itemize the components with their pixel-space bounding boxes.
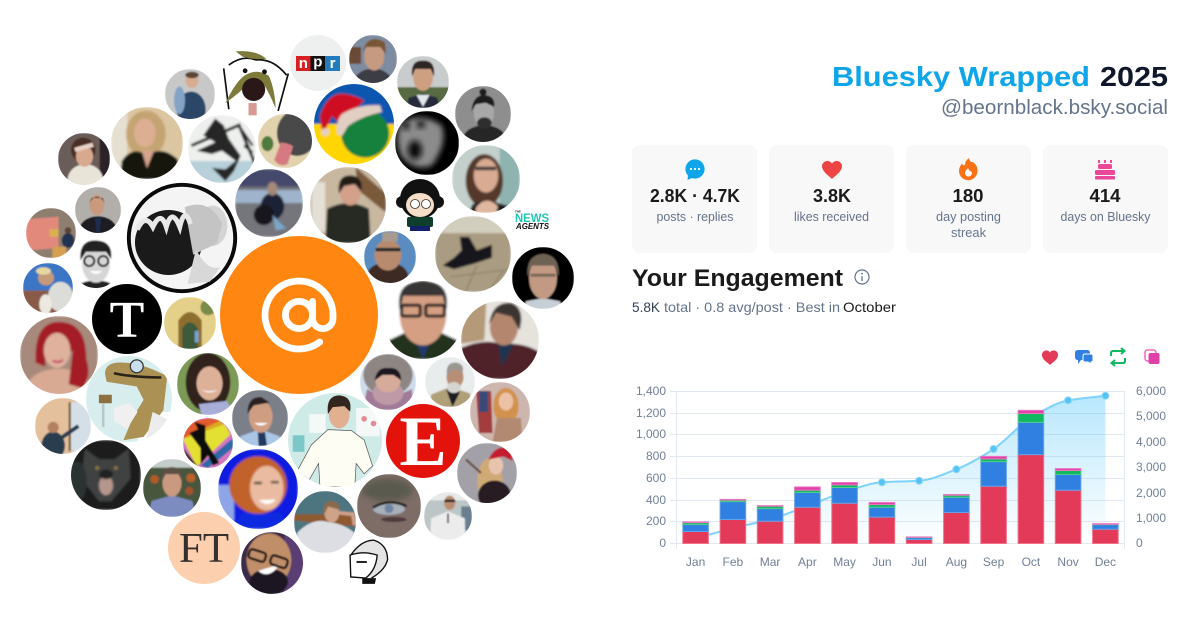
avatar: NPR logo: p: [313, 54, 322, 70]
avatar: The News Agents logo: THE: [515, 210, 521, 214]
avatar: The News Agents logo: NEWS: [515, 213, 549, 225]
card: days on Bluesky: [1043, 145, 1168, 253]
avatar: kid in headband: [58, 133, 110, 185]
stacked bars: [683, 410, 1118, 544]
left axis labels: 200: [646, 514, 666, 528]
card: likes received: likes received: [794, 210, 869, 224]
avatar: blurry ghost face: [395, 111, 459, 175]
icon: birthday cake: [1095, 160, 1115, 180]
avatar: man in dark suit: [75, 187, 121, 233]
month labels: Sep: [983, 555, 1005, 569]
left axis labels: [636, 384, 666, 550]
month labels: Apr: [798, 555, 817, 569]
left axis labels: 1,400: [636, 384, 666, 398]
avatar: blonde woman with santa hat: [457, 443, 517, 503]
avatar: bald laughing man with glasses: [241, 532, 306, 595]
month labels: Jan: [686, 555, 705, 569]
card: posts and replies: [632, 145, 757, 253]
bars: reposts: [683, 414, 1118, 538]
avatar: drawn woman line art: [350, 540, 388, 584]
avatar: bride of frankenstein: [126, 182, 238, 294]
title: Bluesky Wrapped 2025: [832, 61, 1168, 92]
avatar: smiling man with blue tie: [232, 390, 288, 446]
avatar: older man on black: [512, 247, 574, 309]
avatar: woman in fur hood: [360, 354, 416, 410]
avatar: red-haired woman on blue: [218, 449, 298, 529]
title: Bluesky Wrapped 2025: Bluesky Wrapped: [832, 61, 1090, 92]
heading: Your Engagement: Your Engagement: [632, 265, 843, 292]
month labels: Aug: [946, 555, 967, 569]
avatar: Ukraine flag santa hat: [314, 84, 394, 164]
avatar: orange at-sign main bubble: [220, 236, 378, 394]
avatar: man in white lab coat: [424, 492, 472, 540]
avatar: The News Agents logo: [515, 210, 549, 231]
avatar bubble cluster: [20, 35, 574, 595]
avatar: New York Times logo: T: [110, 292, 144, 349]
avatar: rainbow silhouette: [183, 418, 233, 468]
month labels: Jun: [872, 555, 892, 569]
avatar: The Economist E logo: [386, 403, 460, 481]
cumulative area: [696, 396, 1105, 544]
left axis labels: 0: [659, 536, 666, 550]
bars: likes: [683, 455, 1118, 544]
avatar: bearded man with topknot: [455, 86, 511, 142]
avatar: man in dark-rim glasses: [389, 281, 457, 359]
icon: heart: [822, 161, 842, 179]
month labels: Dec: [1095, 555, 1116, 569]
icon: info: [855, 270, 869, 284]
avatar: close-up eye: [357, 474, 421, 538]
avatar: red-haired woman: [20, 316, 98, 394]
month labels: Feb: [723, 555, 744, 569]
avatar: smiling man with round glasses: [79, 240, 112, 288]
avatar: New York Times logo: [92, 284, 162, 354]
chart legend icons: [1042, 348, 1160, 366]
avatar: NPR logo: [290, 35, 346, 91]
avatar: The Economist E logo: E: [399, 403, 447, 481]
avatar: cartoon scientist in white shirt: [288, 393, 382, 487]
cumulative line: [696, 396, 1105, 538]
avatar: heraldic lion: [188, 115, 256, 183]
stats cards row: [632, 145, 1168, 253]
avatar: dog with tongue: [258, 114, 312, 168]
title: Bluesky Wrapped 2025: 2025: [1100, 61, 1168, 92]
legend: replies bubbles: [1075, 350, 1093, 364]
card: days on Bluesky: days on Bluesky: [1060, 210, 1151, 224]
grid: [670, 391, 1125, 549]
engagement summary text: [632, 299, 896, 315]
right axis labels: 6,000: [1136, 384, 1166, 398]
avatar: man in hat with dog: [23, 263, 73, 314]
card: day posting streak: 180: [952, 186, 984, 206]
avatar: black dog on stone floor: [435, 216, 511, 292]
avatar: Financial Times FT logo: FT: [179, 526, 229, 572]
avatar: red-haired girl with flag: [470, 382, 530, 442]
left axis labels: 1,200: [636, 406, 666, 420]
card: day posting streak: [906, 145, 1031, 253]
avatar: person with black dog in snow: [235, 169, 303, 237]
card: posts and replies: posts · replies: [656, 210, 734, 224]
month labels: Oct: [1022, 555, 1041, 569]
month labels: Jul: [911, 555, 927, 569]
card: posts and replies: 2.8K · 4.7K: [650, 186, 740, 206]
engagement summary text: 5.8K: [632, 299, 661, 315]
avatar: person under yellow arch: [164, 297, 216, 349]
avatar: blonde woman in black: [111, 107, 183, 179]
avatar: man presenting poster: [35, 398, 91, 460]
handle text: @beornblack.bsky.social: [941, 97, 1168, 119]
avatar: man with glasses selfie: [364, 231, 416, 283]
month labels: May: [833, 555, 856, 569]
icon: flame: [959, 158, 978, 180]
avatar: presenter by screen: [26, 208, 76, 259]
month labels: Nov: [1057, 555, 1079, 569]
icon: speech bubble: [685, 159, 705, 180]
left axis labels: 600: [646, 471, 666, 485]
card: likes received: [769, 145, 894, 253]
avatar: man in maroon sweater: [461, 301, 539, 379]
right axis labels: 1,000: [1136, 511, 1166, 525]
legend: reposts arrows: [1111, 348, 1125, 366]
left axis labels: 1,000: [636, 427, 666, 441]
card: day posting streak: streak: [951, 226, 987, 240]
card: day posting streak: day posting: [936, 210, 1001, 224]
left axis labels: 400: [646, 493, 666, 507]
avatar: man in plaid shirt: [143, 459, 201, 517]
right axis labels: [1136, 384, 1166, 550]
right axis labels: 4,000: [1136, 435, 1166, 449]
avatar: woman in white blouse: [294, 491, 356, 553]
engagement summary text: total · 0.8 avg/post · Best in: [664, 299, 840, 315]
bars: replies: [683, 422, 1118, 540]
right axis labels: 3,000: [1136, 460, 1166, 474]
avatar: older man with white beard: [425, 357, 475, 407]
avatar: South Park style character: [396, 179, 444, 231]
avatar: velociraptor scientist illustration: [86, 356, 181, 442]
bars: quotes: [683, 410, 1118, 537]
card: days on Bluesky: 414: [1090, 186, 1120, 206]
avatar: woman in dark blazer: [310, 167, 386, 243]
right axis labels: 2,000: [1136, 486, 1166, 500]
engagement summary text: October: [843, 299, 896, 315]
right axis labels: 5,000: [1136, 409, 1166, 423]
legend: likes heart: [1042, 350, 1058, 365]
avatar: snarling wolf: [66, 440, 141, 510]
monthly engagement chart: [636, 384, 1166, 569]
avatar: NPR logo: n: [299, 55, 308, 72]
cumulative points: [692, 392, 1109, 542]
avatar: NPR logo: r: [330, 55, 336, 72]
month labels: [686, 555, 1116, 569]
card: likes received: 3.8K: [813, 186, 851, 206]
avatar: moustache dog drawing: [224, 51, 288, 115]
left axis labels: 800: [646, 449, 666, 463]
legend: quotes pink squares: [1145, 350, 1160, 364]
avatar: Financial Times FT logo: [168, 512, 240, 584]
right axis labels: 0: [1136, 536, 1143, 550]
avatar: man in navy tee: [165, 69, 215, 119]
avatar: woman with glasses: [452, 145, 520, 213]
avatar: The News Agents logo: AGENTS: [515, 221, 549, 231]
avatar: smiling woman long dark hair: [177, 353, 239, 415]
avatar: smiling man with white shirt: [397, 56, 449, 108]
avatar: painted man: [349, 35, 397, 83]
month labels: Mar: [760, 555, 780, 569]
